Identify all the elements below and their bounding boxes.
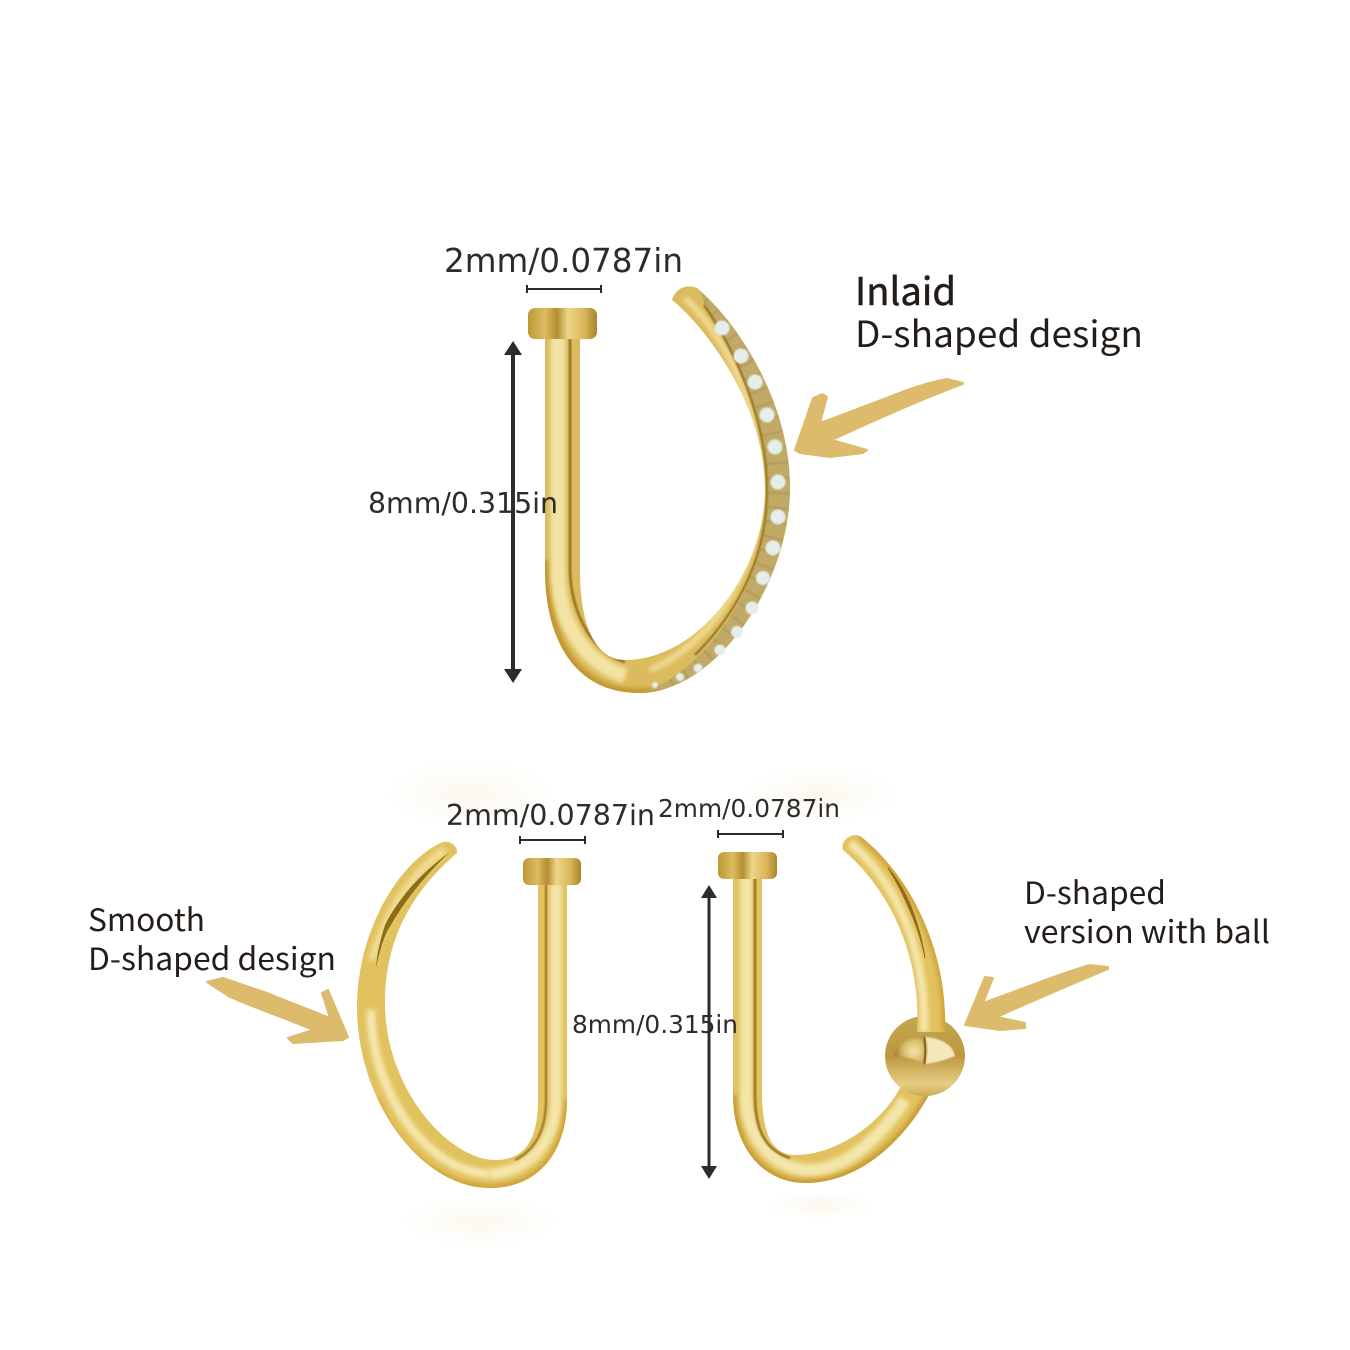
ball [885,1016,965,1096]
dimension: top height [504,341,522,683]
dimension: left width [520,836,585,844]
label: inlaid: Inlaid [855,261,956,316]
label: ball [1024,868,1270,952]
dark rail [695,305,767,655]
ring: inlaid D-shaped [528,280,800,700]
label: right height: 8mm/0.315in [572,1010,738,1039]
dimension: right height [701,885,717,1179]
upper arm [842,835,946,1032]
label: inlaid [855,261,1143,358]
gems [652,320,786,688]
arrow: ball [965,965,1108,1030]
cap [528,308,597,339]
ring: D-shaped with ball [718,830,965,1190]
cap [718,852,777,879]
label: left width: 2mm/0.0787in [446,799,655,832]
lower arm [733,879,928,1183]
ring body [545,286,790,693]
dimension: right width [718,830,783,838]
dark reflection [376,852,450,968]
ring: smooth D-shaped [350,830,581,1195]
dimension: top width [527,285,601,293]
arrow: inlaid [795,379,963,457]
faint reflections [385,760,900,1246]
label: smooth: Smooth [88,895,205,940]
cap [523,858,581,885]
label: ball: version with ball [1024,907,1270,952]
label: top width: 2mm/0.0787in [444,242,683,280]
label: smooth [88,895,336,979]
label: inlaid: D-shaped design [855,306,1143,358]
ring body [357,842,567,1188]
label: top height: 8mm/0.315in [368,487,558,520]
arrow: smooth [207,978,348,1043]
label: right width: 2mm/0.0787in [658,794,840,823]
label: smooth: D-shaped design [88,934,336,979]
label: ball: D-shaped [1024,868,1166,913]
gem band [640,285,795,695]
